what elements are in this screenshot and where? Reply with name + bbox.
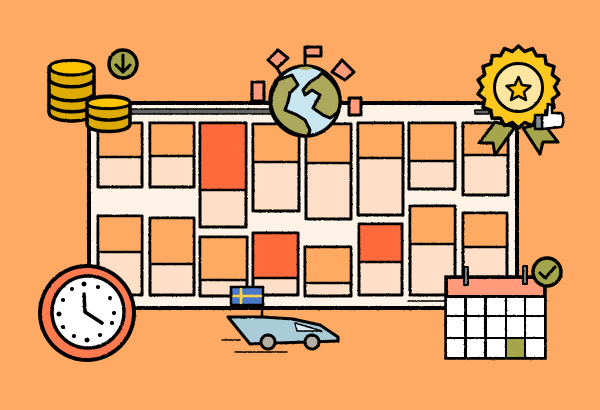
rosette xyxy=(478,46,559,128)
clock hands xyxy=(84,294,102,323)
speed lines xyxy=(222,340,287,352)
icon: globe with flags xyxy=(252,47,361,136)
icon: calendar xyxy=(445,266,546,359)
icon: large coin stack xyxy=(49,60,94,121)
icon: clock xyxy=(40,266,134,360)
thumbs up xyxy=(542,104,563,129)
icon: small coin stack xyxy=(87,96,130,132)
top row of columns xyxy=(98,123,508,227)
swedish flag xyxy=(231,287,263,305)
flag pole xyxy=(261,300,263,318)
icon: ribbon award xyxy=(478,46,563,155)
star xyxy=(506,77,530,100)
board panel xyxy=(89,103,517,308)
clock ticks xyxy=(56,282,116,342)
flags xyxy=(252,47,361,115)
calendar cells xyxy=(447,298,544,357)
windshield xyxy=(295,323,322,331)
car body xyxy=(228,317,338,344)
icon: down arrow badge xyxy=(109,50,137,78)
binder rings xyxy=(464,267,468,285)
wheels xyxy=(261,335,275,349)
bottom row of columns xyxy=(98,206,507,296)
icon: car with flag xyxy=(222,287,338,352)
ribbons xyxy=(479,122,515,155)
icon: check badge xyxy=(533,258,561,286)
